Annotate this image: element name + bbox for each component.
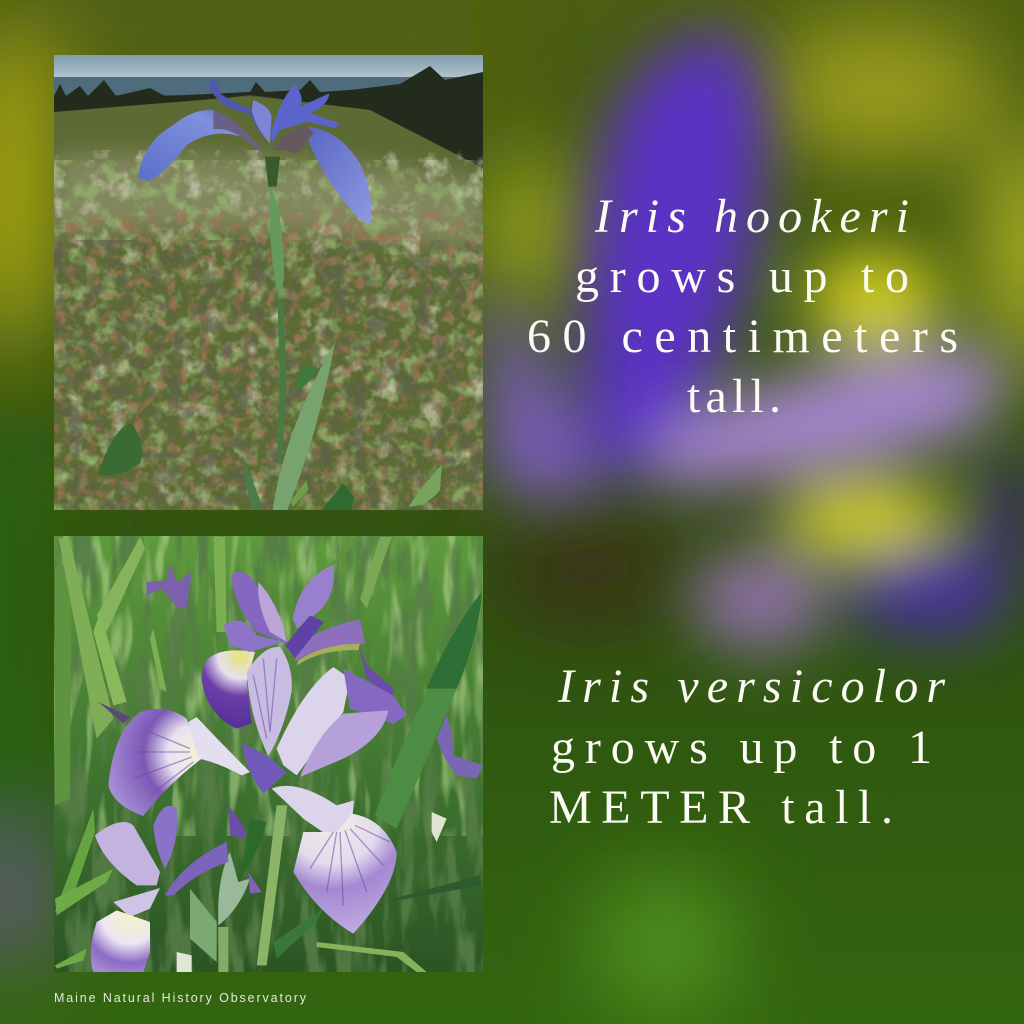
text: Iris hookeri: grows up to — [575, 250, 909, 303]
photo: Iris hookeri — [54, 55, 483, 510]
upper flower — [359, 646, 394, 696]
text: Iris hookeri: Iris hookeri — [594, 190, 909, 243]
text: Iris versicolor — [549, 660, 945, 834]
text: Iris hookeri — [527, 190, 958, 423]
lower flower — [95, 822, 160, 885]
small flower right — [437, 715, 483, 779]
text: Iris hookeri: tall. — [687, 370, 781, 423]
text: Iris versicolor: grows up to 1 — [551, 721, 932, 774]
photo: Iris versicolor — [54, 536, 483, 972]
text: Iris versicolor: METER tall. — [549, 781, 893, 834]
stems — [257, 805, 287, 965]
credit: Maine Natural History Observatory — [54, 991, 307, 1005]
text: Iris versicolor: Iris versicolor — [557, 660, 945, 713]
petal veins — [133, 659, 390, 905]
small flower top left — [147, 564, 192, 607]
text: Iris hookeri: 60 centimeters — [527, 310, 958, 363]
main flower — [108, 709, 202, 816]
iris hookeri plant — [98, 80, 442, 510]
grass and flowers — [55, 537, 483, 972]
